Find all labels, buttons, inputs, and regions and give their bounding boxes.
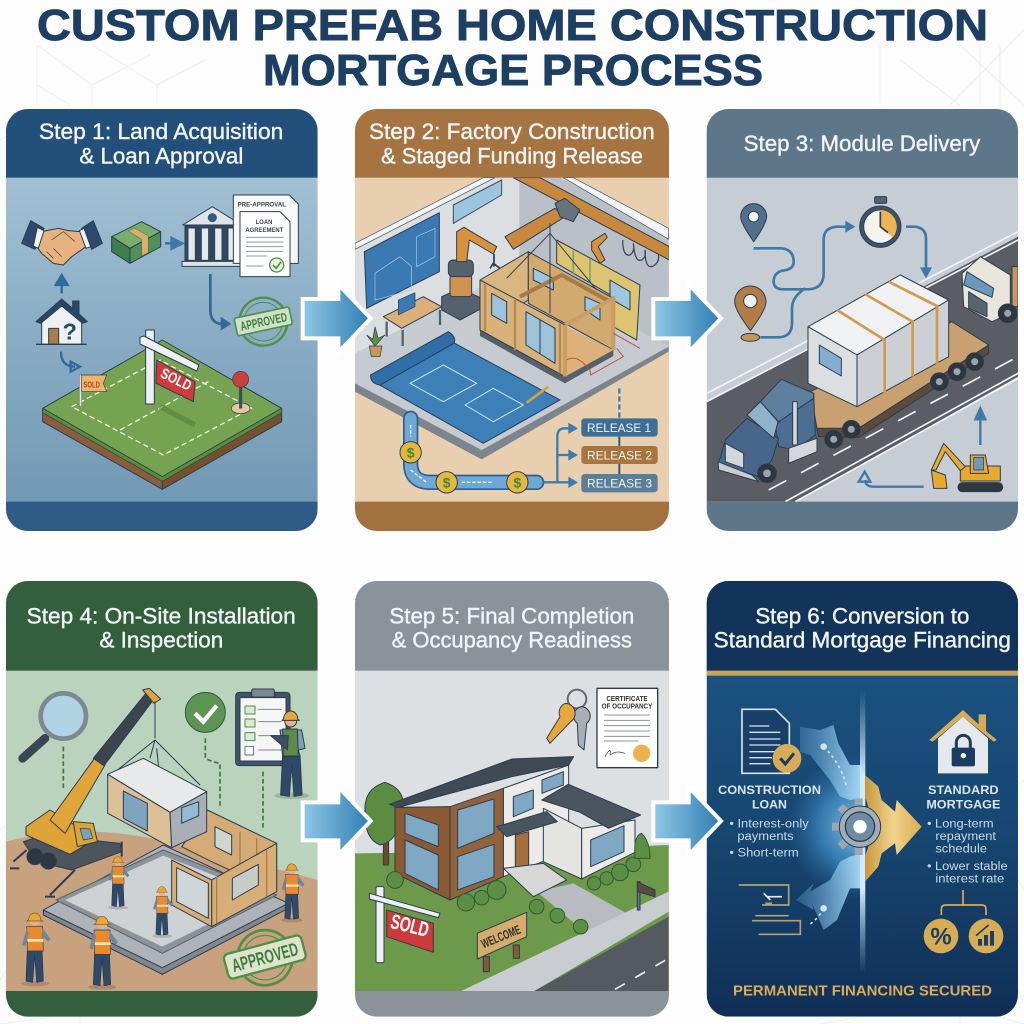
workers xyxy=(21,857,305,990)
document: pre-approval xyxy=(233,195,298,263)
heading: step 6: Standard Mortgage Financing xyxy=(714,628,1011,653)
text: standard mortgage: MORTGAGE xyxy=(926,797,1000,811)
walkway xyxy=(537,883,627,933)
crane xyxy=(10,688,161,897)
icon: keys xyxy=(547,690,590,750)
crane hook and slings xyxy=(113,702,200,845)
coins: $ xyxy=(407,444,415,460)
release labels xyxy=(581,418,658,492)
inspector xyxy=(271,711,309,799)
flatbed trailer xyxy=(810,322,989,448)
text: permanent financing secured: PERMANENT FINANCING SECURED xyxy=(733,984,992,1000)
bullets: standard mortgage: • Long-term xyxy=(927,816,994,830)
coins: $ xyxy=(513,474,521,490)
highway xyxy=(707,237,1018,502)
right factory wall xyxy=(519,178,669,348)
title: MORTGAGE PROCESS xyxy=(263,46,763,95)
module front wall xyxy=(480,280,565,377)
overhead beam xyxy=(513,178,669,260)
heading: step 1: Step 1: Land Acquisition xyxy=(39,119,283,144)
arrow: money to bank xyxy=(165,238,182,249)
icon: wrench paper xyxy=(739,885,800,934)
yellow wall panel xyxy=(557,240,640,340)
heading: step 2 xyxy=(369,119,655,168)
text: standard mortgage xyxy=(926,783,1000,811)
road xyxy=(533,917,669,992)
wrapped module xyxy=(808,275,949,407)
pencil xyxy=(527,387,548,403)
panel: step 1 land acquisition xyxy=(6,109,318,532)
arrow: step 4 to 5 xyxy=(303,787,371,855)
heading: step 4 xyxy=(27,604,296,653)
module interior back walls xyxy=(480,252,613,350)
module base xyxy=(480,330,613,383)
bullets: standard mortgage: interest rate xyxy=(935,872,1005,886)
heading: step 5: & Occupancy Readiness xyxy=(392,628,632,653)
wall blueprint xyxy=(364,213,439,308)
delivery truck rear xyxy=(962,257,1018,323)
arrow: house to land xyxy=(61,352,80,372)
heading: step 2: Step 2: Factory Construction xyxy=(369,119,655,144)
funding pipeline xyxy=(411,418,537,482)
icon: growth chart xyxy=(969,919,1003,953)
sign: sold flag: SOLD xyxy=(83,380,100,389)
heading: step 2: & Staged Funding Release xyxy=(381,143,643,168)
release labels: RELEASE 3 xyxy=(587,477,652,491)
document: certificate of occupancy: OF OCCUPANCY xyxy=(602,703,653,710)
dashed down from check xyxy=(205,738,220,807)
stamp: approved: APPROVED xyxy=(229,938,300,976)
icon: blue map pin xyxy=(741,204,767,242)
rear module wall xyxy=(182,810,277,892)
right hoist arm xyxy=(592,233,607,263)
factory windows xyxy=(453,180,502,223)
dirt ground xyxy=(6,832,318,992)
floor edge xyxy=(355,347,669,459)
cross beam and trolley xyxy=(505,198,580,249)
lane markings xyxy=(769,357,1018,490)
heading: step 6: Step 6: Conversion to xyxy=(755,604,969,629)
left factory wall xyxy=(355,178,519,360)
heading: step 3: Step 3: Module Delivery xyxy=(744,131,980,156)
icon: magnifying glass xyxy=(23,693,86,758)
heading: step 5 xyxy=(389,604,634,653)
robot arm xyxy=(442,227,500,320)
gold half gear arrow xyxy=(865,775,922,882)
clipboard checklist xyxy=(236,689,290,766)
module open side frame xyxy=(565,298,613,377)
document: loan agreement: LOAN xyxy=(256,219,272,226)
release labels: RELEASE 2 xyxy=(587,449,652,463)
wall top strip xyxy=(355,178,669,249)
stamp: approved xyxy=(234,296,293,347)
blue lower gear arc and arrow xyxy=(796,853,862,930)
document: pre-approval: PRE-APPROVAL xyxy=(238,202,286,209)
heading: step 6 xyxy=(714,604,1011,653)
icon: green check xyxy=(185,692,225,732)
branch arrows xyxy=(543,428,573,482)
hoist cables xyxy=(507,223,597,313)
sidewalk xyxy=(460,892,669,992)
icon: money stack xyxy=(112,222,161,263)
road edge lines xyxy=(707,232,1018,502)
document: certificate of occupancy xyxy=(597,688,658,768)
marker: red pin xyxy=(231,371,250,414)
blue glow xyxy=(789,753,862,900)
sign: sold xyxy=(369,887,440,963)
module floor xyxy=(565,327,613,377)
plant xyxy=(367,327,385,357)
heading: step 5: Step 5: Final Completion xyxy=(389,604,634,629)
arrow: down to approved xyxy=(210,274,223,324)
icon: handshake xyxy=(22,221,102,265)
icon: percent: % xyxy=(930,923,952,950)
bullets: construction loan: payments xyxy=(737,829,794,843)
icon: construction loan document xyxy=(742,709,801,773)
panel: step 5 final completion xyxy=(355,581,669,1018)
house main xyxy=(389,757,574,900)
sign: sold flag xyxy=(79,375,107,407)
bullets: construction loan xyxy=(729,816,809,860)
panel: step 2 factory construction xyxy=(355,109,669,532)
icon: percent xyxy=(924,919,958,953)
arrow: house up xyxy=(56,275,68,293)
tree xyxy=(365,782,403,865)
foundation slab xyxy=(43,845,288,974)
heading: step 4: & Inspection xyxy=(99,628,223,653)
arrow: step 5 to 6 xyxy=(653,787,721,855)
bullets: construction loan: • Interest-only xyxy=(729,816,809,830)
land parcel xyxy=(43,340,282,489)
road dashes xyxy=(615,958,669,989)
arrow: step 2 to 3 xyxy=(653,284,721,352)
blueprint sheet xyxy=(371,332,560,443)
document: loan agreement xyxy=(240,212,290,277)
heading: step 1: & Loan Approval xyxy=(79,143,243,168)
lawn xyxy=(355,845,669,992)
bullets: standard mortgage xyxy=(927,816,1008,886)
wire coil xyxy=(567,333,640,375)
arrow: left from excavator xyxy=(859,472,924,487)
sign: sold post xyxy=(140,330,199,425)
arrowheads xyxy=(568,423,578,488)
document: certificate of occupancy: CERTIFICATE xyxy=(606,696,648,703)
house right wing xyxy=(542,784,641,879)
light divider xyxy=(860,690,865,973)
release labels: RELEASE 1 xyxy=(587,421,651,435)
icon: bank xyxy=(182,207,242,266)
icon: orange map pin xyxy=(735,286,766,341)
arrowhead: approved xyxy=(221,317,231,331)
shrubs xyxy=(387,833,650,934)
heading: step 1 xyxy=(39,119,283,168)
desk with laptop xyxy=(383,293,442,346)
title xyxy=(37,1,988,95)
stamp: approved xyxy=(219,921,311,995)
panel: step 3 module delivery xyxy=(707,109,1018,532)
floating module xyxy=(108,758,207,848)
bullets: standard mortgage: • Lower stable xyxy=(927,859,1008,873)
semi truck cab xyxy=(718,379,817,483)
coins: $ xyxy=(443,474,451,490)
route arrowheads xyxy=(845,221,932,278)
nodes xyxy=(820,743,827,912)
entry and door xyxy=(497,812,567,897)
front module wall xyxy=(172,843,277,927)
text: construction loan: LOAN xyxy=(752,797,787,811)
icon: house with lock xyxy=(929,710,997,773)
sign: welcome xyxy=(477,912,527,972)
document: loan agreement: AGREEMENT xyxy=(245,227,283,234)
house upper white block xyxy=(503,765,569,877)
coins xyxy=(400,442,528,493)
connector: benefits xyxy=(941,890,986,915)
title: CUSTOM PREFAB HOME CONSTRUCTION xyxy=(37,1,988,50)
arrow: step 1 to 2 xyxy=(303,284,371,352)
dashed link to releases xyxy=(616,388,623,418)
stamp: approved: APPROVED xyxy=(239,310,288,334)
icon: house with question mark xyxy=(36,299,87,344)
mail post xyxy=(637,882,655,910)
bullets: standard mortgage: repayment xyxy=(935,829,997,843)
bullets: construction loan: • Short-term xyxy=(729,846,799,860)
dotted paths xyxy=(808,747,847,926)
factory floor xyxy=(355,288,668,450)
text: construction loan xyxy=(718,783,821,811)
sign: sold post: SOLD xyxy=(158,366,194,395)
panel: step 6 conversion to standard mortgage xyxy=(707,581,1018,1017)
heading: step 4: Step 4: On-Site Installation xyxy=(27,604,296,629)
text: construction loan: CONSTRUCTION xyxy=(718,783,821,797)
arrow: up from excavator xyxy=(975,408,985,445)
blue upper gear arc xyxy=(800,725,862,800)
dashed down from clipboard xyxy=(260,772,265,828)
text: standard mortgage: STANDARD xyxy=(928,783,999,797)
route lines xyxy=(754,227,926,337)
panel: step 4 on-site installation xyxy=(6,581,318,1018)
cable loops xyxy=(623,240,659,267)
icon: excavator xyxy=(931,443,1003,492)
bullets: standard mortgage: schedule xyxy=(935,842,987,856)
icon: stopwatch xyxy=(860,197,901,247)
dashed down from magnifier xyxy=(61,747,66,790)
central gear xyxy=(832,798,881,855)
icon: house with question mark: ? xyxy=(63,318,77,344)
sign: welcome: WELCOME xyxy=(479,923,523,951)
sign: sold: SOLD xyxy=(388,910,431,942)
